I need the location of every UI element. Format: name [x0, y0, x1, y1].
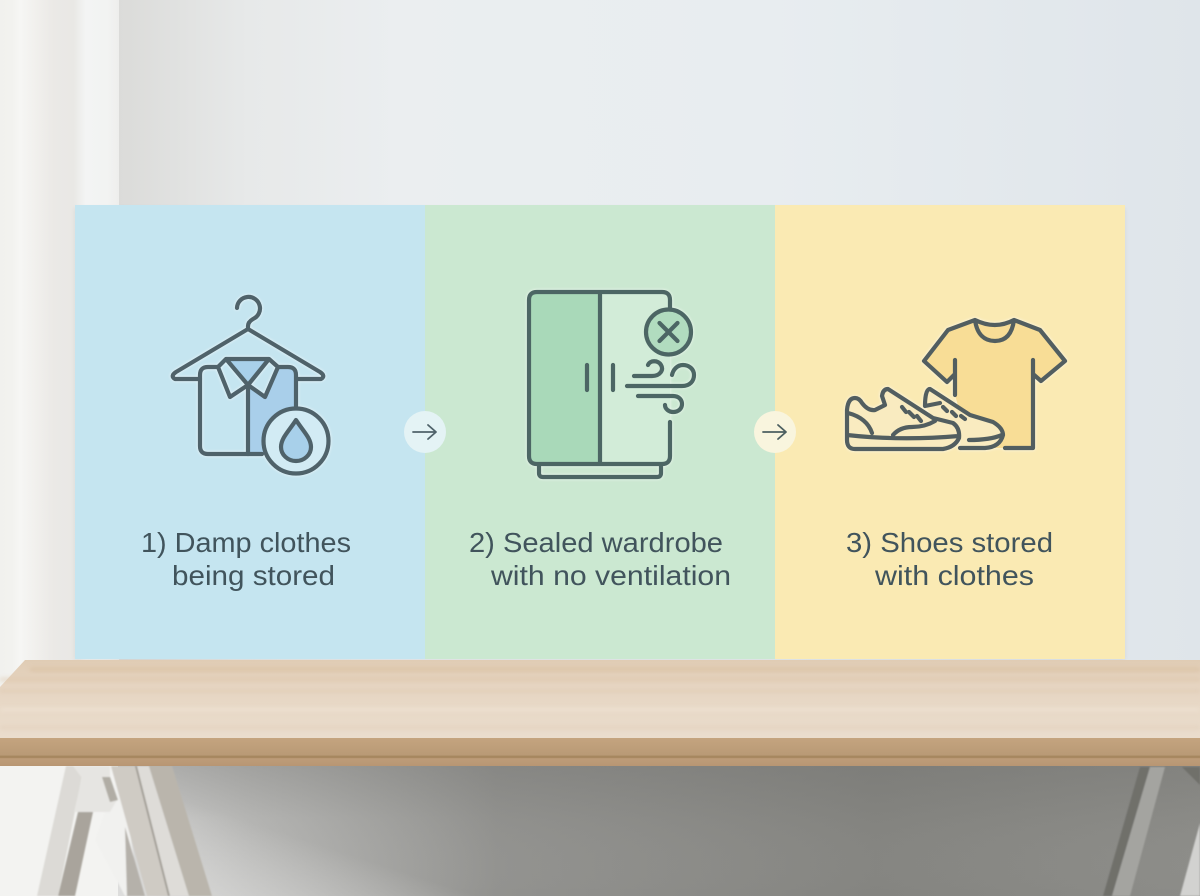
- table legs right: [1103, 767, 1200, 896]
- panel 2 background: [425, 205, 775, 659]
- panel shadow: [75, 208, 1125, 660]
- table legs left: [37, 766, 212, 896]
- label 2: 2) Sealed wardrobe: [469, 527, 723, 558]
- icon: wardrobe with blocked airflow: [529, 292, 694, 477]
- label 1: 1) Damp clothes: [141, 527, 351, 558]
- label 3: 3) Shoes stored: [846, 527, 1053, 558]
- icon: shirt on hanger with water drop: [173, 297, 328, 474]
- table edge: [0, 738, 1200, 766]
- label 3: [846, 527, 1053, 591]
- label 3: with clothes: [874, 560, 1034, 591]
- background: curtain: [0, 0, 120, 896]
- icon: t-shirt and sneakers: [847, 320, 1065, 449]
- arrow 2: [754, 411, 796, 453]
- panel 3 background: [775, 205, 1125, 659]
- background: wall: [118, 0, 1200, 662]
- panel 1: damp clothes: [75, 205, 425, 659]
- label 2: with no ventilation: [490, 560, 731, 591]
- panel 3: shoes with clothes: [775, 205, 1125, 659]
- table top: [0, 660, 1200, 738]
- label 1: being stored: [172, 560, 335, 591]
- arrow 1: [404, 411, 446, 453]
- label 1: [141, 527, 351, 591]
- label 2: [469, 527, 731, 591]
- panel 1 background: [75, 205, 425, 659]
- panel 2: sealed wardrobe: [425, 205, 775, 659]
- background: shaded wall under table: [118, 766, 1200, 896]
